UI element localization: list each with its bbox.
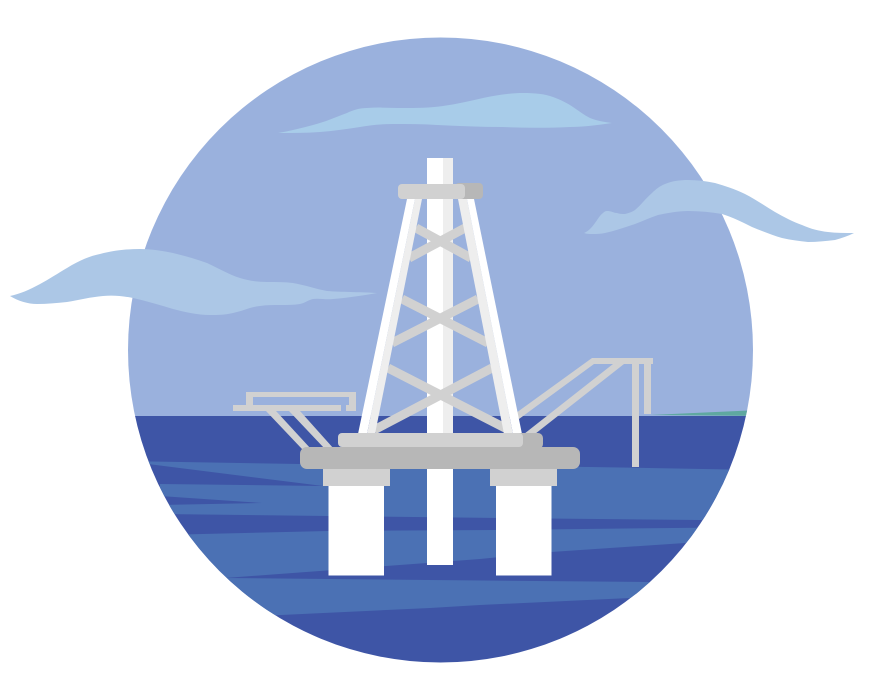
cloud: top <box>278 93 612 133</box>
right platform <box>516 358 653 467</box>
oil rig <box>233 158 653 576</box>
tower crown <box>398 183 483 199</box>
right pontoon <box>490 468 557 576</box>
main deck <box>300 447 580 469</box>
left pontoon <box>323 468 390 576</box>
left platform <box>233 392 356 449</box>
cross braces <box>374 228 507 430</box>
centre pole <box>427 158 453 565</box>
scene: sky and sea disc <box>120 37 760 663</box>
cloud: left <box>10 249 377 315</box>
cloud: right <box>584 180 854 242</box>
left tower leg <box>358 199 422 434</box>
upper deck <box>338 433 543 449</box>
right tower leg <box>458 199 522 434</box>
distant land sliver <box>652 410 748 416</box>
sea <box>128 416 753 663</box>
sky <box>128 37 753 417</box>
lighter water bands <box>120 461 760 616</box>
